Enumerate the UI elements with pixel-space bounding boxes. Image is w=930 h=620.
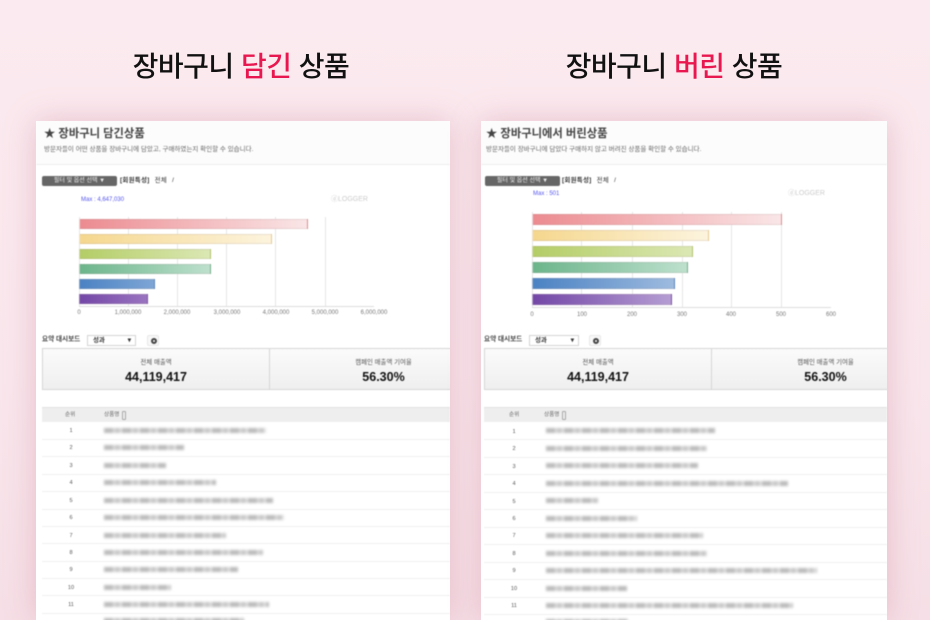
bar 1 [79, 219, 308, 229]
dashboard label: 요약 대시보드 [42, 336, 80, 343]
bar chart: 200 [627, 312, 637, 318]
filter status: [회원특성] 전체 / [120, 177, 174, 184]
bar chart: 5,000,000 [312, 310, 338, 316]
description: 방문자들이 장바구니에 담았다 구매하지 않고 버려진 상품을 확인할 수 있습니다. [486, 146, 701, 153]
bar 3 [79, 249, 211, 259]
contribution value: 56.30% [362, 370, 405, 384]
bar chart: 4,000,000 [263, 310, 289, 316]
product ranking table: 1 [512, 429, 516, 435]
filter button: 필터 및 옵션 선택 ▼ [497, 178, 548, 184]
bar 2 [532, 230, 709, 241]
product ranking table: 7 [69, 533, 73, 539]
product ranking table [43, 426, 449, 620]
bar 1 [532, 214, 782, 225]
panel header [36, 121, 450, 165]
bar chart: 100 [577, 312, 587, 318]
bar 5 [532, 278, 675, 289]
dashboard select: ▾ [571, 337, 574, 344]
product ranking table: 9 [69, 567, 73, 573]
total revenue label: 전체 매출액 [140, 359, 172, 366]
product ranking table: 9 [512, 568, 516, 574]
table header: 순위 [65, 412, 75, 418]
dashboard select [87, 335, 136, 346]
bar chart: 300 [677, 312, 687, 318]
product ranking table: 11 [511, 603, 517, 609]
table header [42, 407, 450, 422]
filter button [42, 176, 117, 186]
bar 6 [532, 294, 672, 305]
logger logo: ⓓLOGGER [788, 190, 825, 197]
bar 5 [79, 279, 155, 289]
product ranking table: 10 [511, 586, 517, 592]
product ranking table: 4 [512, 481, 516, 487]
heading: ★ 장바구니에서 버린상품 [486, 128, 608, 140]
table header: 상품명 [104, 412, 119, 418]
heading: ★ 장바구니 담긴상품 [44, 128, 145, 140]
bar chart: 1,000,000 [115, 310, 141, 316]
bar 3 [532, 246, 693, 257]
product ranking table: 7 [512, 533, 516, 539]
dashboard label: 요약 대시보드 [484, 336, 522, 343]
bar chart: 500 [776, 312, 786, 318]
dashboard select: 성과 [93, 337, 105, 344]
title: items abandoned in cart: 장바구니 버린 상품 [566, 51, 782, 82]
description: 방문자들이 어떤 상품을 장바구니에 담았고, 구매하였는지 확인할 수 있습니다. [44, 146, 253, 153]
summary box [484, 348, 904, 390]
filter status: [회원특성] 전체 / [562, 177, 616, 184]
bar chart: 600 [826, 312, 836, 318]
contribution label: 캠페인 매출액 기여율 [355, 359, 412, 366]
product ranking table: 4 [69, 480, 73, 486]
panel: cart items report [36, 121, 450, 620]
bar 4 [532, 262, 688, 273]
panel header [481, 121, 887, 165]
contribution label: 캠페인 매출액 기여율 [797, 359, 854, 366]
title: items added to cart: 장바구니 담긴 상품 [133, 51, 349, 82]
bar 4 [79, 264, 211, 274]
max label: Max : 4,647,030 [81, 197, 124, 203]
dashboard select: ▾ [128, 337, 131, 344]
bar chart: 6,000,000 [361, 310, 387, 316]
bar 2 [79, 234, 272, 244]
product ranking table: 1 [69, 428, 73, 434]
settings icon [147, 335, 159, 346]
bar chart [530, 189, 836, 318]
bar chart: 400 [726, 312, 736, 318]
product ranking table: 3 [69, 463, 73, 469]
total revenue value: 44,119,417 [567, 370, 629, 384]
product ranking table: 8 [69, 550, 73, 556]
product ranking table [485, 426, 886, 620]
dashboard select: 성과 [535, 337, 547, 344]
product ranking table: 10 [68, 585, 74, 591]
contribution value: 56.30% [804, 370, 847, 384]
bar 6 [79, 294, 148, 304]
product ranking table: 3 [512, 464, 516, 470]
panel: abandoned cart report [481, 121, 887, 620]
product ranking table: 2 [69, 445, 73, 451]
dashboard select [529, 335, 579, 346]
max label: Max : 501 [533, 191, 559, 197]
product ranking table: 5 [512, 499, 516, 505]
axis labels: 0 [530, 312, 534, 318]
product ranking table: 2 [512, 446, 516, 452]
summary box [42, 348, 462, 390]
table header: 순위 [509, 412, 519, 418]
product ranking table: 6 [69, 515, 73, 521]
settings icon [589, 335, 601, 346]
product ranking table: 6 [512, 516, 516, 522]
filter button: 필터 및 옵션 선택 ▼ [54, 178, 105, 184]
product ranking table: 11 [68, 602, 74, 608]
table header: 상품명 [544, 412, 559, 418]
bar chart: 2,000,000 [164, 310, 190, 316]
bar chart [77, 195, 388, 316]
table header [484, 407, 887, 422]
bar chart: 3,000,000 [214, 310, 240, 316]
product ranking table: 5 [69, 498, 73, 504]
logger logo: ⓓLOGGER [331, 196, 368, 203]
axis labels: 0 [77, 310, 81, 316]
total revenue label: 전체 매출액 [582, 359, 614, 366]
product ranking table: 8 [512, 551, 516, 557]
filter button [485, 176, 560, 186]
total revenue value: 44,119,417 [125, 370, 187, 384]
